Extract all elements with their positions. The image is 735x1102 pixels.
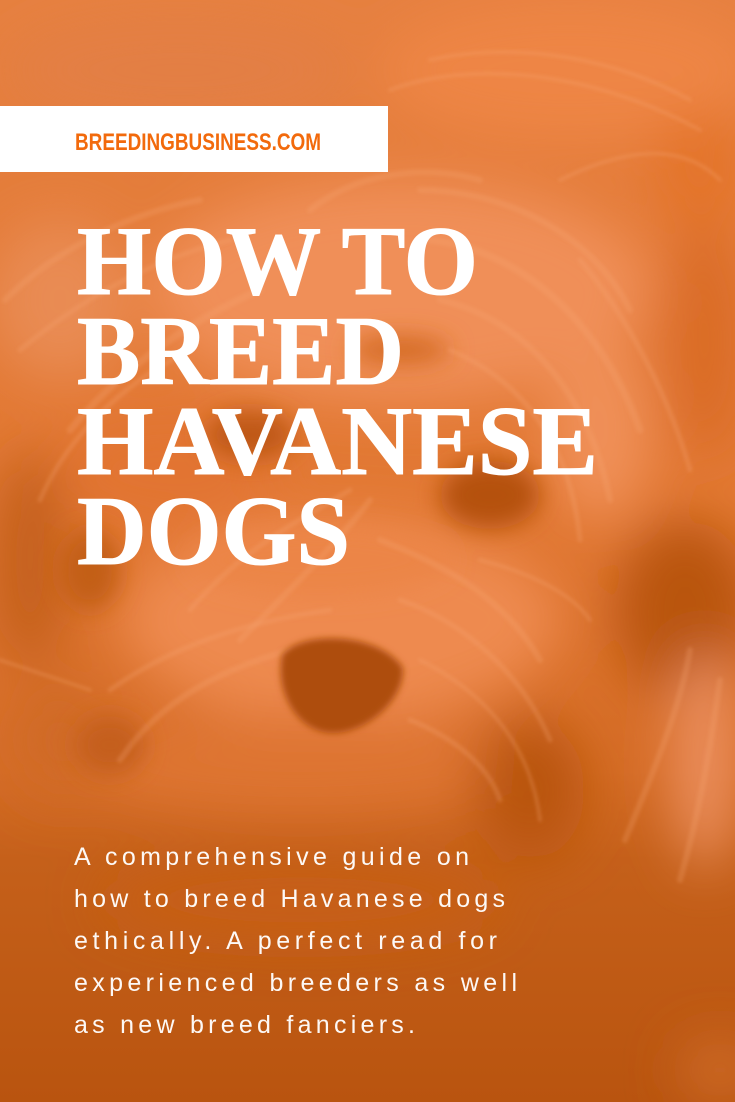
brand banner xyxy=(0,106,388,172)
brand text: BREEDINGBUSINESS.COM xyxy=(75,129,321,156)
description text: as new breed fanciers. xyxy=(74,1011,415,1039)
icon: dog nose xyxy=(281,638,403,733)
description text: experienced breeders as well xyxy=(74,969,517,997)
description text: how to breed Havanese dogs xyxy=(74,885,505,913)
description text: ethically. A perfect read for xyxy=(74,927,497,955)
title: DOGS xyxy=(77,477,350,586)
title: BREED xyxy=(77,297,404,406)
title xyxy=(77,207,598,586)
title: HAVANESE xyxy=(77,387,598,496)
description text xyxy=(74,843,517,1039)
fur strands xyxy=(0,52,720,880)
description text: A comprehensive guide on xyxy=(74,843,469,871)
title: HOW TO xyxy=(77,207,478,316)
